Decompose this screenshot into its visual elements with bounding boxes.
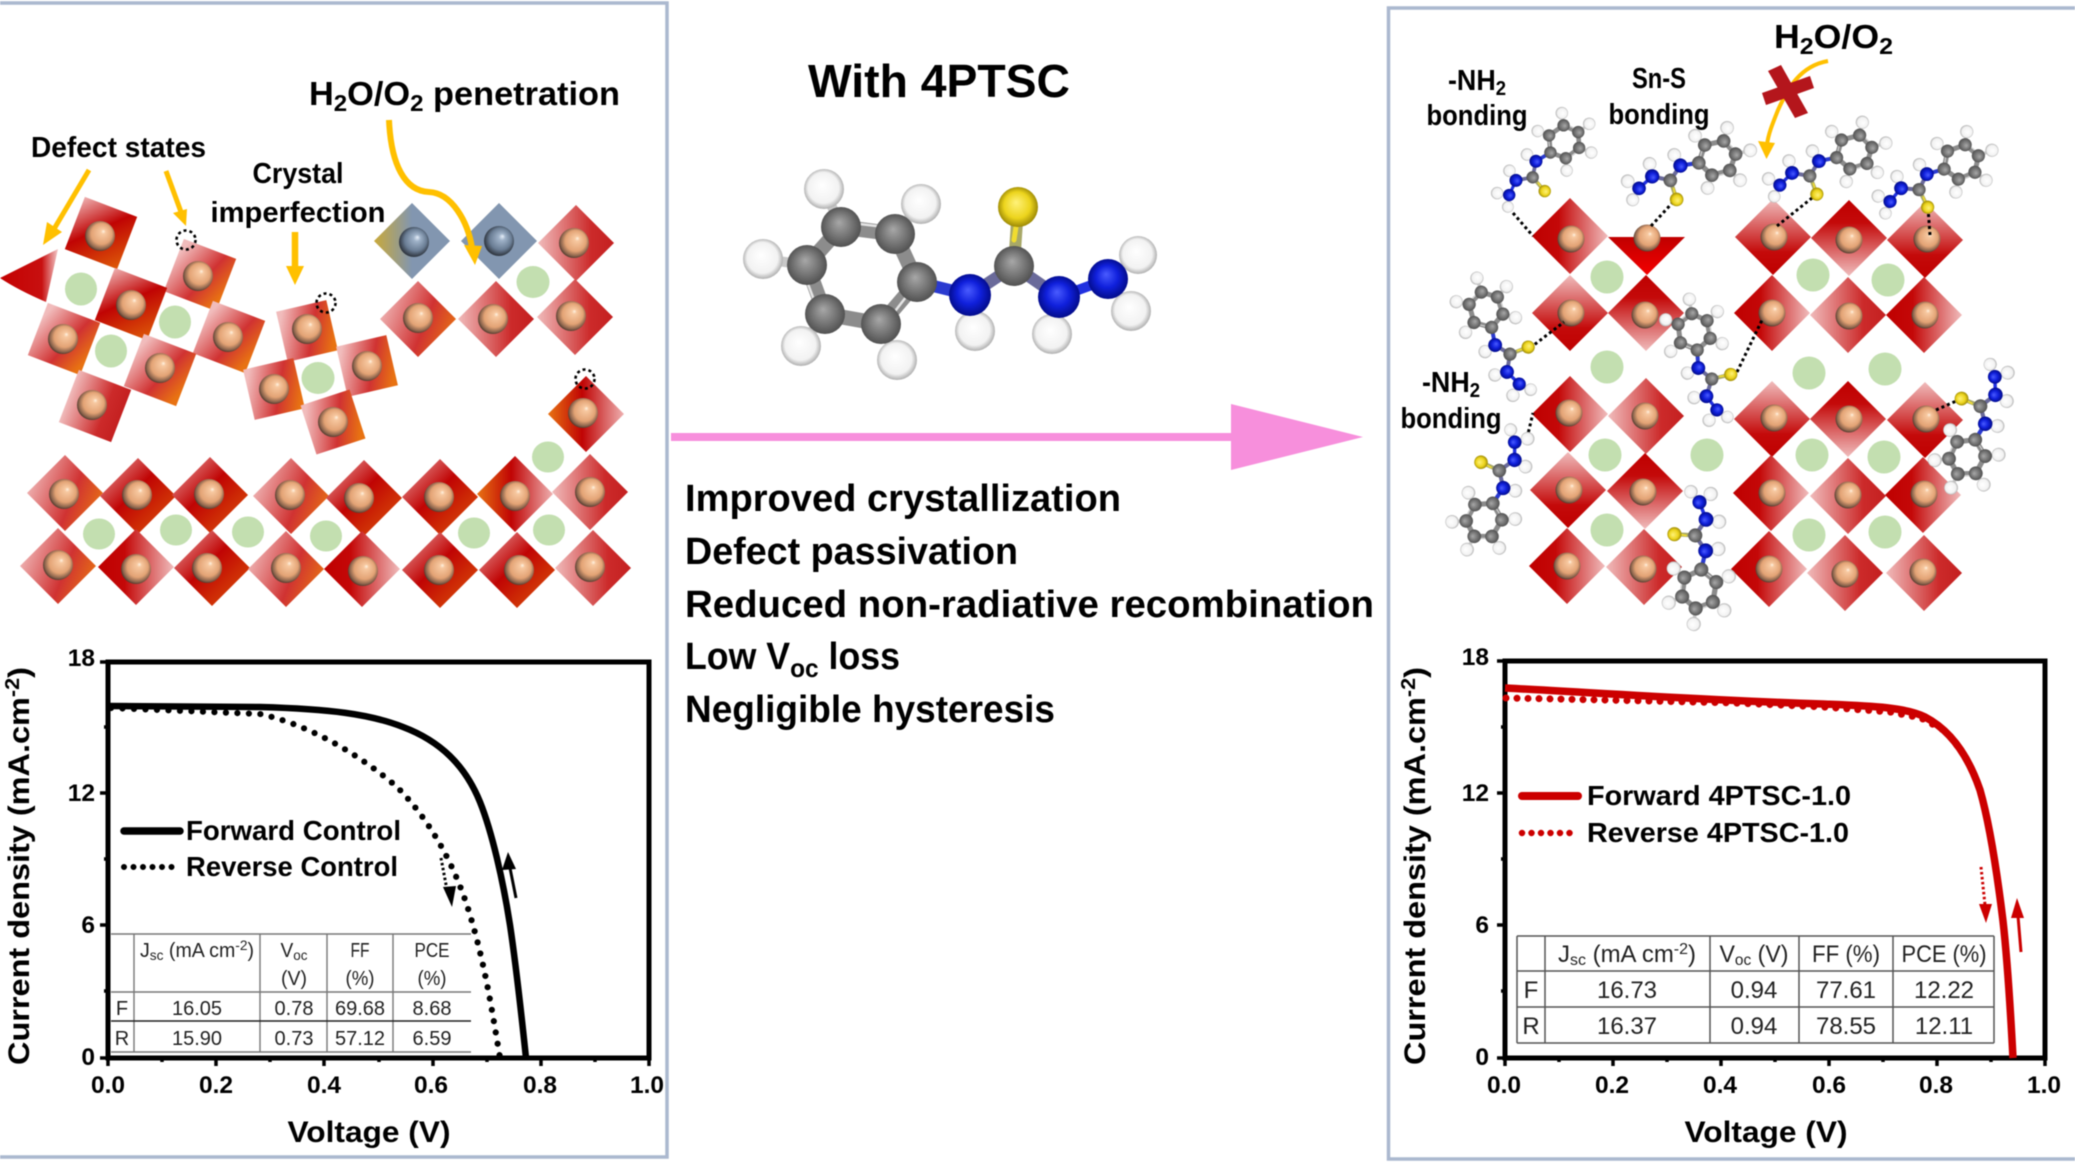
legend — [1522, 780, 1851, 848]
inset table: control metrics: 69.68 — [335, 998, 385, 1020]
label: H2O/O2 penetration: 2 — [334, 90, 347, 116]
inset table: 4PTSC metrics: 0.94 — [1731, 1013, 1777, 1040]
molecule: S-bonded right side — [1919, 349, 2033, 507]
inset table: 4PTSC metrics: 12.22 — [1914, 977, 1974, 1004]
label: H2O/O2 penetration: O/O — [347, 75, 410, 112]
molecule: bottom centre — [1660, 484, 1737, 631]
inset table: control metrics: PCE — [414, 940, 450, 962]
inset table: 4PTSC metrics: 16.37 — [1597, 1013, 1657, 1040]
inset table: 4PTSC metrics: sc — [1570, 952, 1586, 969]
x tick labels: 0.4 — [1703, 1072, 1737, 1099]
y axis title: -2 — [2, 678, 24, 697]
molecule: NH2-bonded top left — [1476, 93, 1613, 230]
x tick labels: 0.6 — [414, 1072, 448, 1099]
perovskite cluster: second imperfect fragment — [243, 300, 398, 454]
legend: Forward Control — [186, 815, 401, 846]
forward curve — [1505, 688, 2013, 1058]
inset table: 4PTSC metrics: 12.11 — [1915, 1013, 1973, 1040]
x tick labels — [1487, 1072, 2061, 1099]
inset table: 4PTSC metrics: FF (%) — [1812, 941, 1880, 968]
arrow: pink transition arrow — [671, 404, 1363, 470]
inset table: control metrics: sc — [150, 947, 163, 963]
benefits list: oc — [790, 653, 819, 683]
label: H2O/O2 penetration: 2 — [410, 90, 423, 116]
label: -NH2 bonding lower — [1400, 367, 1502, 435]
x tick labels: 0.0 — [91, 1072, 125, 1099]
molecule: Sn-S bonded top — [1611, 110, 1768, 229]
inset table: control metrics: (%) — [346, 968, 374, 990]
inset table: 4PTSC metrics: J — [1558, 941, 1570, 968]
label: crystal imperfection — [210, 158, 386, 229]
benefits list: Negligible hysteresis — [685, 689, 1055, 731]
y tick labels — [68, 645, 95, 1071]
icon: red cross block — [1762, 65, 1814, 118]
molecule: 4PTSC ball-and-stick — [743, 169, 1157, 380]
inset table: 4PTSC metrics: -2 — [1674, 941, 1688, 958]
inset table: 4PTSC metrics: F — [1524, 977, 1538, 1004]
y tick labels: 0 — [81, 1044, 95, 1071]
x tick labels: 0.2 — [199, 1072, 233, 1099]
vacancy markers: dotted circles — [176, 230, 594, 388]
legend: Reverse 4PTSC-1.0 — [1587, 817, 1849, 848]
arrows: orange defect pointers — [43, 120, 482, 285]
x tick labels: 0.8 — [1919, 1072, 1953, 1099]
label: H2O/O2 blocked: 2 — [1879, 33, 1893, 59]
y axis title: ) — [1399, 667, 1432, 678]
y tick labels: 12 — [68, 780, 95, 807]
inset table: control metrics: 15.90 — [172, 1028, 222, 1050]
inset table: control metrics — [111, 934, 471, 1052]
inset table: control metrics: R — [115, 1028, 129, 1050]
inset table: control metrics: FF — [350, 940, 370, 962]
label: -NH2 bonding top: bonding — [1426, 100, 1528, 132]
label: H2O/O2 blocked: O/O — [1814, 18, 1879, 55]
scan arrows — [1979, 867, 2024, 952]
perovskite film: bottom rows with A-site cations — [20, 376, 631, 608]
inset table: 4PTSC metrics: 78.55 — [1816, 1013, 1876, 1040]
forward curve — [108, 706, 526, 1058]
label: -NH2 bonding top — [1426, 65, 1528, 132]
x tick labels — [91, 1072, 664, 1099]
benefits list: Defect passivation — [685, 531, 1018, 573]
x tick labels: 0.8 — [523, 1072, 557, 1099]
chart: 4PTSC J-V curve — [1398, 644, 2061, 1149]
molecule: S-bonded left side — [1438, 260, 1559, 413]
y axis title: ) — [3, 667, 36, 678]
inset table: 4PTSC metrics: 0.94 — [1731, 977, 1777, 1004]
plot frame — [108, 662, 649, 1058]
perovskite cluster: degraded top-right with blue oxidised octahedra — [374, 203, 614, 357]
label: -NH2 bonding lower: 2 — [1470, 380, 1480, 402]
inset table: 4PTSC metrics — [1517, 936, 1994, 1043]
x tick labels: 0.0 — [1487, 1072, 1521, 1099]
inset table: control metrics: (V) — [281, 968, 307, 990]
x tick labels: 0.2 — [1595, 1072, 1629, 1099]
x tick labels: 0.6 — [1812, 1072, 1846, 1099]
label: defect states: Defect states — [31, 132, 206, 164]
y tick labels: 6 — [1475, 912, 1489, 939]
molecule: S-bonded centre — [1649, 284, 1756, 435]
inset table: control metrics: (%) — [418, 968, 446, 990]
label: -NH2 bonding lower: -NH — [1422, 367, 1474, 399]
label: H2O/O2 penetration: H — [309, 75, 333, 112]
benefits list — [685, 478, 1374, 731]
y axis title: Current density (mA.cm — [1399, 725, 1432, 1065]
inset table: 4PTSC metrics: 77.61 — [1816, 977, 1876, 1004]
label: Sn-S bonding — [1608, 63, 1710, 131]
x tick labels: 1.0 — [630, 1072, 664, 1099]
label: H2O/O2 blocked: H — [1774, 18, 1798, 55]
arrow: blocked moisture path — [1758, 61, 1828, 159]
legend — [124, 815, 401, 882]
inset table: 4PTSC metrics: ) — [1688, 941, 1696, 968]
inset table: control metrics: 8.68 — [413, 998, 451, 1020]
label: Sn-S bonding: Sn-S — [1632, 63, 1686, 95]
inset table: control metrics: 6.59 — [413, 1028, 451, 1050]
plot frame — [1505, 661, 2045, 1058]
inset table: control metrics: (mA cm — [163, 940, 235, 962]
inset table: control metrics: oc — [293, 947, 308, 963]
label: -NH2 bonding lower: bonding — [1400, 403, 1502, 435]
bonding: dotted interaction lines — [1513, 194, 1963, 438]
axis ticks — [100, 662, 649, 1066]
inset table: control metrics: -2 — [235, 937, 248, 953]
inset table: control metrics: 0.73 — [275, 1028, 313, 1050]
label: -NH2 bonding top: 2 — [1496, 78, 1506, 100]
y tick labels: 6 — [81, 912, 95, 939]
chart: control J-V curve — [2, 645, 664, 1149]
x axis title: Voltage (V) — [1684, 1116, 1848, 1149]
y tick labels — [1462, 644, 1489, 1071]
benefits list: Reduced non-radiative recombination — [685, 584, 1374, 626]
inset table: control metrics: 16.05 — [172, 998, 222, 1020]
legend: Forward 4PTSC-1.0 — [1587, 780, 1851, 811]
inset table: 4PTSC metrics: R — [1522, 1013, 1540, 1040]
label: crystal imperfection: imperfection — [210, 197, 386, 229]
benefits list: Improved crystallization — [685, 478, 1121, 520]
x axis title: Voltage (V) — [288, 1116, 450, 1149]
label: H2O/O2 blocked: 2 — [1800, 33, 1814, 59]
benefits list: Low V — [685, 636, 797, 678]
y axis title: -2 — [1398, 678, 1420, 697]
molecule: S-bonded top right — [1859, 112, 2012, 241]
scan arrows — [441, 852, 516, 907]
label: Sn-S bonding: bonding — [1608, 99, 1710, 131]
perovskite cluster: tilted defective octahedra — [0, 197, 265, 442]
y tick labels: 12 — [1462, 780, 1489, 807]
label: crystal imperfection: Crystal — [252, 158, 344, 190]
panel: 4PTSC perovskite (right) — [1388, 8, 2075, 1159]
legend: Reverse Control — [186, 851, 398, 882]
perovskite lattice: passivated film, right block — [1731, 199, 1963, 611]
molecule: NH2-bonded lower left — [1436, 413, 1553, 570]
label: -NH2 bonding top: -NH — [1448, 65, 1500, 97]
inset table: 4PTSC metrics: oc — [1735, 952, 1751, 969]
panel: control perovskite (left) — [0, 3, 667, 1157]
heading: With 4PTSC: With 4PTSC — [808, 55, 1070, 107]
inset table: control metrics: V — [280, 940, 294, 962]
inset table: 4PTSC metrics: (mA cm — [1586, 941, 1674, 968]
y axis title: Current density (mA.cm — [3, 725, 36, 1065]
inset table: control metrics: 0.78 — [275, 998, 313, 1020]
x tick labels: 0.4 — [307, 1072, 341, 1099]
benefits list: loss — [819, 636, 900, 678]
inset table: control metrics: J — [140, 940, 150, 962]
inset table: control metrics: 57.12 — [335, 1028, 385, 1050]
reverse curve — [111, 708, 500, 1058]
x tick labels: 1.0 — [2027, 1072, 2061, 1099]
y tick labels: 0 — [1475, 1044, 1489, 1071]
y tick labels: 18 — [1462, 644, 1489, 671]
inset table: 4PTSC metrics: PCE (%) — [1902, 941, 1986, 968]
inset table: 4PTSC metrics: V — [1720, 941, 1736, 968]
inset table: control metrics: F — [116, 998, 128, 1020]
reverse curve — [1506, 698, 1968, 760]
molecule: S-bonded top centre — [1751, 104, 1904, 225]
inset table: 4PTSC metrics: (V) — [1751, 941, 1788, 968]
label: H2O/O2 penetration: penetration — [423, 75, 620, 112]
y tick labels: 18 — [68, 645, 95, 672]
axis ticks — [1497, 661, 2045, 1066]
inset table: 4PTSC metrics: 16.73 — [1597, 977, 1657, 1004]
inset table: control metrics: ) — [247, 940, 254, 962]
perovskite lattice: passivated film, left block — [1529, 198, 1724, 605]
